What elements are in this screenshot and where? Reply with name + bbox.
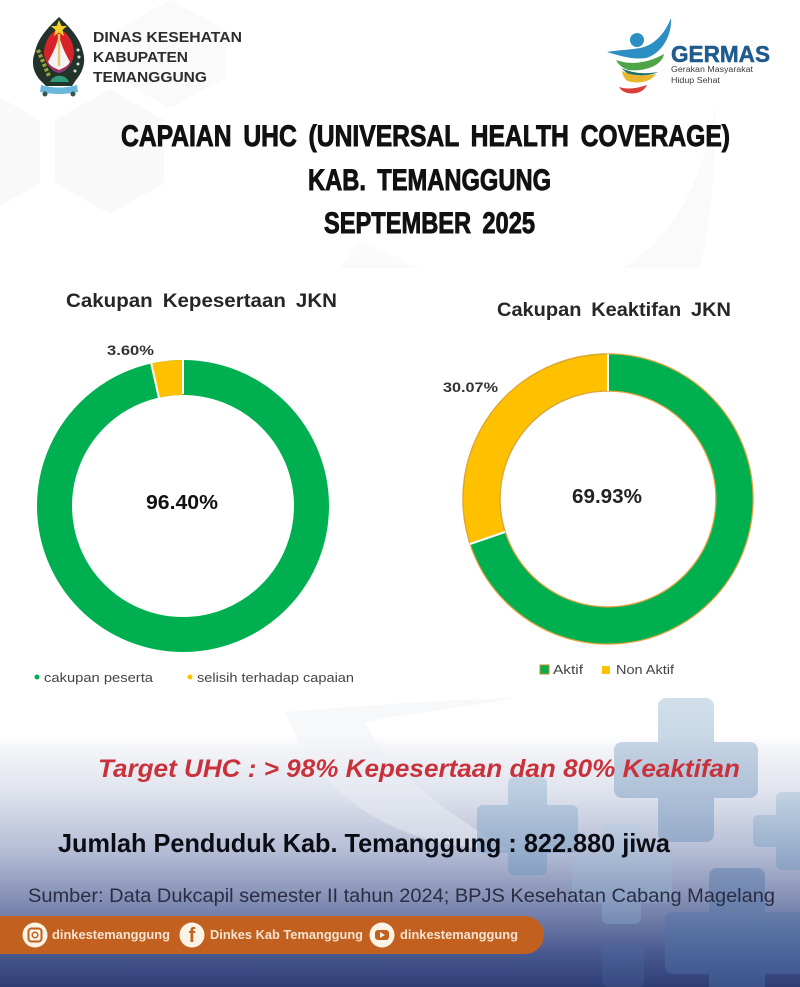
icon: instagram [22, 922, 48, 948]
legend: selisih terhadap capaian [197, 670, 354, 685]
donut chart [449, 340, 767, 658]
logo: GERMAS: Hidup Sehat [671, 76, 721, 85]
facebook name: Dinkes Kab Temanggung [210, 928, 363, 942]
title [121, 120, 730, 240]
legend: Non Aktif [616, 662, 674, 677]
legend: cakupan peserta [44, 670, 154, 685]
population statement: Jumlah Penduduk Kab. Temanggung : 822.880 jiwa [58, 828, 671, 858]
title: SEPTEMBER 2025 [324, 207, 535, 240]
agency name [93, 30, 242, 86]
youtube handle: dinkestemanggung [400, 928, 518, 942]
icon: facebook [180, 922, 204, 948]
instagram handle: dinkestemanggung [52, 928, 170, 942]
agency name: KABUPATEN [93, 50, 188, 66]
centre value: 96.40% [146, 492, 218, 514]
source: Sumber: Data Dukcapil semester II tahun 2024; BPJS Kesehatan Cabang Magelang [28, 885, 775, 907]
legend [540, 662, 674, 677]
logo: GERMAS [607, 18, 770, 94]
icon: facebook: f [189, 925, 196, 947]
icon: youtube [370, 922, 394, 948]
chart heading: Cakupan Kepesertaan JKN [66, 291, 337, 312]
legend [34, 670, 354, 685]
logo: GERMAS: Gerakan Masyarakat [671, 65, 754, 74]
centre value: 69.93% [572, 486, 642, 508]
social media bar [0, 916, 544, 954]
agency name: TEMANGGUNG [93, 70, 207, 86]
slice label: 30.07% [443, 379, 499, 395]
slice label: 3.60% [107, 342, 155, 358]
donut chart [29, 352, 337, 660]
logo: GERMAS: GERMAS [671, 41, 770, 67]
agency name: DINAS KESEHATAN [93, 30, 242, 46]
title: KAB. TEMANGGUNG [308, 164, 551, 197]
chart heading: Cakupan Keaktifan JKN [497, 300, 731, 321]
panel: cakupan keaktifan JKN [443, 300, 767, 677]
target UHC statement: Target UHC : > 98% Kepesertaan dan 80% Keaktifan [98, 755, 740, 783]
legend: Aktif [553, 662, 583, 677]
logo: Kabupaten Temanggung crest [33, 17, 84, 96]
panel: cakupan kepesertaan JKN [29, 291, 354, 685]
